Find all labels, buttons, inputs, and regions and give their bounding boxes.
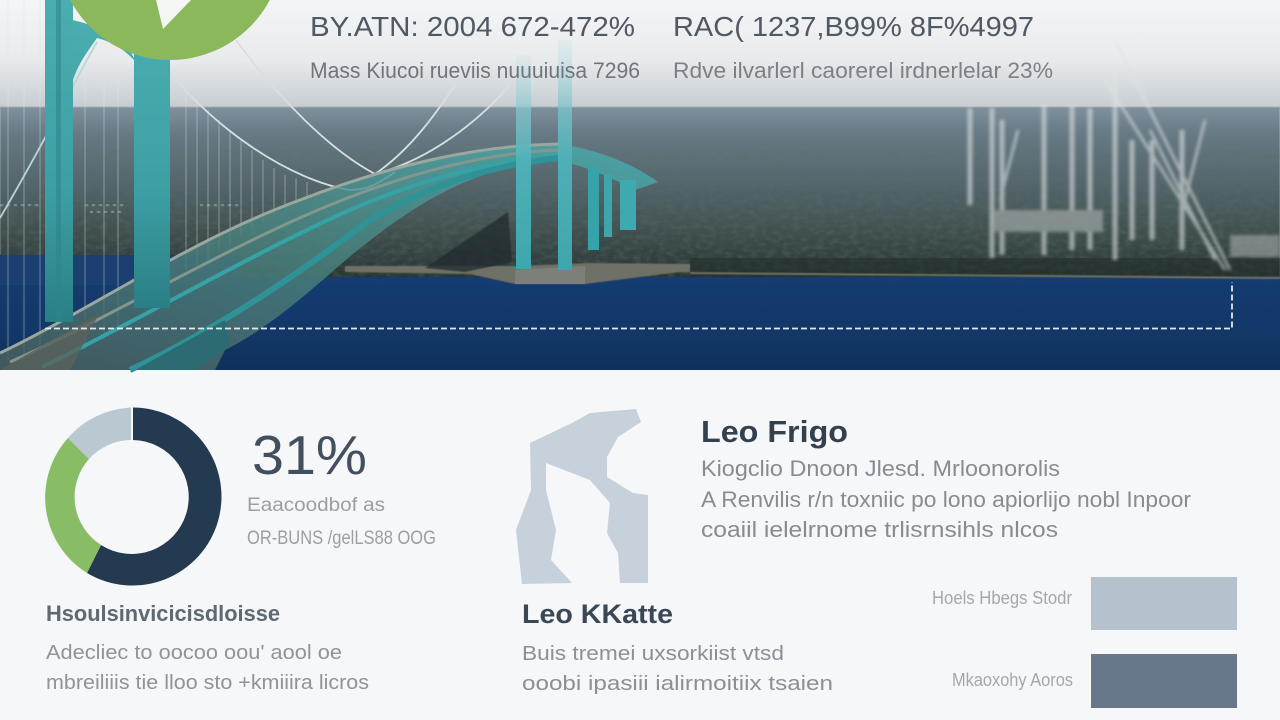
segment: dark — [87, 408, 221, 585]
shoreline — [345, 212, 1280, 284]
header stat: left — [310, 11, 640, 83]
second body — [522, 643, 833, 695]
profile body: Kiogclio Dnoon Jlesd. Mrloonorolis — [701, 456, 1060, 481]
left bridge tower (thin) — [45, 0, 73, 322]
dashed measurement line — [45, 282, 1232, 328]
bridge hangers — [8, 0, 307, 360]
donut stat caption — [247, 495, 436, 549]
right bridge tower — [516, 40, 636, 270]
legend item: dark swatch — [952, 654, 1237, 708]
left bridge tower (thick) — [73, 20, 170, 308]
segment: green — [45, 438, 101, 573]
legend item: light swatch — [932, 577, 1237, 630]
legend item: dark swatch: Mkaoxohy Aoros — [952, 670, 1073, 690]
green logo badge — [57, 0, 283, 60]
second body: ooobi ipasiii ialirmoitiix tsaien — [522, 673, 833, 695]
profile body — [701, 456, 1191, 542]
header stat: right — [673, 11, 1053, 83]
donut stat caption: OR-BUNS /gelLS88 OOG — [247, 528, 436, 549]
second heading: Leo Kkatte: Leo KKatte — [522, 599, 673, 629]
water — [0, 255, 1280, 370]
bridge deck sweeping curve — [0, 144, 658, 370]
segment: light — [68, 408, 131, 459]
left section body: mbreiliiis tie lloo sto +kmiiira licros — [46, 672, 369, 694]
left section body — [46, 642, 369, 694]
clutter band along the left hangers — [0, 205, 240, 212]
header stat: left: BY.ATN: 2004 672-472% — [310, 11, 635, 42]
ghost bridge outline at right — [970, 40, 1280, 270]
left section body: Adecliec to oocoo oou' aool oe — [46, 642, 342, 664]
legend — [932, 577, 1237, 708]
legend item: light swatch: Hoels Hbegs Stodr — [932, 588, 1072, 608]
hero photo: bridge over water — [0, 0, 1280, 370]
main suspension cables — [0, 40, 510, 218]
left section heading: Hsoulsinvicicisdloisse — [46, 601, 280, 626]
header stat: left: Mass Kiucoi rueviis nuuuiuisa 7296 — [310, 58, 640, 83]
donut stat caption: Eaacoodbof as — [247, 495, 385, 516]
sky — [0, 0, 1280, 110]
header stat: right: Rdve ilvarlerl caorerel irdnerlelar 23% — [673, 58, 1053, 83]
second body: Buis tremei uxsorkiist vtsd — [522, 643, 784, 665]
icon: bridge tower silhouette — [516, 409, 648, 584]
forest hillside — [0, 107, 1280, 280]
header stat: right: RAC( 1237,B99% 8F%4997 — [673, 11, 1034, 42]
donut stat value: 31% — [252, 424, 367, 486]
donut chart — [45, 408, 221, 585]
profile body: A Renvilis r/n toxniic po lono apiorlijo nobl Inpoor — [701, 487, 1191, 512]
profile heading: Leo Frigo: Leo Frigo — [701, 414, 848, 449]
profile body: coaiil ielelrnome trlisrnsihls nlcos — [701, 517, 1058, 542]
